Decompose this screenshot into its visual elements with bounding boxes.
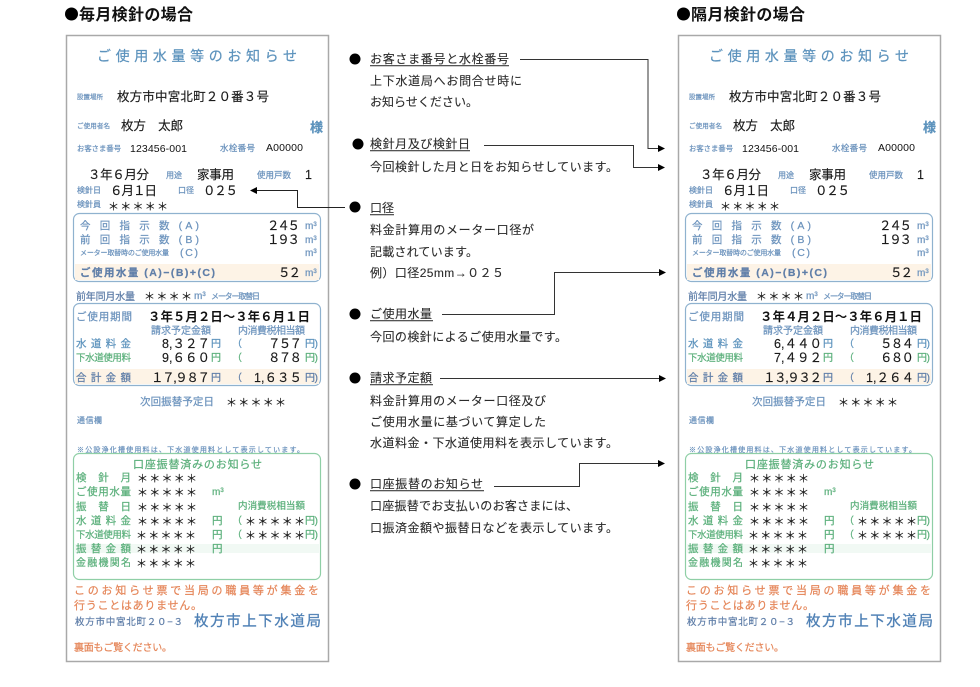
account transfer box: ＊＊＊＊＊ — [748, 544, 808, 556]
meter reading box — [686, 214, 932, 282]
account transfer box: ご使用水量 — [688, 485, 744, 498]
next transfer date: ＊＊＊＊＊ — [226, 397, 286, 409]
account transfer box: ＊＊＊＊＊ — [137, 487, 197, 499]
reading date and meter diameter: ６月１日 — [110, 184, 157, 198]
account transfer box: ＊＊＊＊＊ — [748, 558, 808, 570]
customer and faucet numbers: お客さま番号 — [77, 144, 121, 153]
explanation: planned billing amount: 請求予定額 — [370, 371, 432, 385]
meter reader — [77, 199, 168, 213]
account transfer box — [74, 454, 320, 580]
previous year usage: ＊＊＊＊ — [756, 291, 804, 303]
account transfer box: 水 道 料 金 — [76, 514, 132, 527]
account transfer box: 振 替 金 額 — [688, 542, 744, 555]
meter reading box: m³ — [917, 235, 929, 246]
billing box: 6,４４０ — [774, 337, 822, 351]
reading date and meter diameter: 検針日 — [77, 185, 101, 195]
explanation: water usage: ご使用水量 — [370, 306, 432, 321]
bureau address and name: 枚方市中宮北町２０−３ — [687, 616, 795, 628]
customer and faucet numbers: 123456-001 — [742, 143, 799, 155]
account transfer box: ＊＊＊＊＊ — [136, 544, 196, 556]
billing box: （ — [844, 352, 854, 364]
account transfer box: ＊＊＊＊＊ — [245, 530, 305, 542]
explanation: meter diameter: 口径 — [370, 201, 394, 215]
explanation: account transfer notice — [350, 477, 618, 535]
bureau address and name: 枚方市中宮北町２０−３ — [75, 616, 183, 628]
account transfer box: ＊＊＊＊＊ — [749, 487, 809, 499]
meter reading box: m³ — [917, 248, 929, 259]
account transfer box: ＊＊＊＊＊ — [136, 530, 196, 542]
reading month, use, households: ３年６月分 — [88, 168, 149, 182]
meter reading box: (C) — [792, 247, 810, 259]
meter reading box: 今 回 指 示 数 (A) — [692, 219, 811, 232]
billing box: 円) — [305, 339, 318, 350]
account transfer box: 振 替 日 — [76, 500, 131, 513]
billing box: 円 — [211, 339, 221, 350]
meter reader: 検針員 — [77, 199, 101, 209]
billing box: 合 計 金 額 — [688, 371, 744, 384]
billing box: 円) — [305, 373, 318, 384]
reading month, use, households — [700, 168, 924, 182]
reading date and meter diameter — [689, 184, 850, 198]
meter reading box: ２４５ — [267, 219, 300, 233]
account transfer box — [686, 454, 932, 580]
remarks label: 通信欄 — [689, 415, 714, 425]
explanation: customer and faucet numbers — [350, 52, 522, 109]
arrow: reading month to right card — [484, 146, 665, 171]
reading month, use, households: 使用戸数 — [869, 170, 903, 180]
billing box: 円 — [823, 339, 833, 350]
billing box: ７５７ — [268, 337, 302, 351]
reading date and meter diameter: 検針日 — [689, 185, 713, 195]
warning notice: このお知らせ票で当局の職員等が集金を — [74, 583, 319, 597]
explanation: planned billing amount: 水道料金・下水道使用料を表示しています。 — [370, 435, 618, 450]
billing box: 請求予定金額 — [151, 324, 211, 337]
next transfer date: 次回振替予定日 — [752, 395, 826, 408]
billing box: 1,６３５ — [254, 371, 302, 385]
account transfer box: 水 道 料 金 — [688, 514, 744, 527]
account transfer box: ＊＊＊＊＊ — [137, 516, 197, 528]
explanation: meter diameter — [350, 201, 534, 280]
reading month, use, households: 用途 — [778, 171, 794, 180]
account transfer box: 検 針 月 — [688, 471, 743, 484]
customer and faucet numbers: 水栓番号 — [220, 143, 255, 153]
billing box: 水 道 料 金 — [688, 337, 744, 350]
explanation: water usage: 今回の検針によるご使用水量です。 — [370, 329, 567, 344]
meter reading box: １９３ — [879, 233, 912, 247]
explanation: meter diameter: 例）口径25mm→０２５ — [370, 266, 504, 280]
meter reading box: 前 回 指 示 数 (B) — [80, 233, 199, 246]
billing box: ３年４月２日～３年６月１日 — [760, 309, 922, 324]
account transfer box: 円 — [824, 515, 834, 527]
previous year usage — [688, 290, 872, 303]
customer name — [689, 118, 936, 135]
previous year usage: 前年同月水量 — [76, 290, 135, 303]
reading month, use, households: 1 — [917, 168, 924, 182]
billing box: 請求予定金額 — [763, 324, 823, 337]
meter reading box: m³ — [917, 221, 929, 232]
arrow: diameter to left card — [250, 187, 345, 208]
installation address: 枚方市中宮北町２０番３号 — [729, 89, 881, 104]
heading: bi-monthly reading: 隔月検針の場合 — [691, 5, 805, 24]
account transfer box: ＊＊＊＊＊ — [749, 473, 809, 485]
reading month, use, households: 使用戸数 — [257, 170, 291, 180]
meter reading box: m³ — [305, 248, 317, 259]
account transfer box: 円 — [212, 543, 222, 555]
meter reading box: m³ — [917, 268, 929, 279]
reading month, use, households — [88, 168, 312, 182]
billing box: 1,２６４ — [866, 371, 914, 385]
explanation: account transfer notice: 口座振替のお知らせ — [370, 477, 483, 491]
installation address: 枚方市中宮北町２０番３号 — [117, 89, 269, 104]
explanation: customer and faucet numbers: お知らせください。 — [370, 95, 478, 109]
billing box — [686, 304, 932, 386]
explanation: planned billing amount: ご使用水量に基づいて算定した — [370, 414, 546, 429]
previous year usage: メーター取替日 — [211, 291, 260, 301]
reading month, use, households: 家事用 — [197, 168, 234, 182]
previous year usage: m³ — [806, 291, 818, 302]
account transfer box: 振 替 日 — [688, 500, 743, 513]
explanation: meter diameter: 記載されています。 — [370, 245, 478, 259]
account transfer box: （ — [844, 529, 854, 541]
account transfer box: ＊＊＊＊＊ — [857, 516, 917, 528]
septic note: ※公設浄化槽使用料は、下水道使用料として表示しています。 — [77, 445, 304, 454]
arrow: billing amount to right card — [440, 375, 666, 382]
account transfer box: ＊＊＊＊＊ — [749, 516, 809, 528]
billing box: １３,９３２ — [763, 371, 822, 385]
warning notice — [686, 583, 931, 612]
arrow: account transfer to right card — [494, 460, 665, 486]
card title: ご使用水量等のお知らせ — [709, 48, 909, 64]
reading month, use, households: 用途 — [166, 171, 182, 180]
explanation: reading month and date: 検針月及び検針日 — [370, 136, 470, 151]
account transfer box: 円) — [917, 516, 930, 527]
account transfer box: 円) — [917, 530, 930, 541]
account transfer box: 円) — [305, 516, 318, 527]
account transfer box: 円) — [305, 530, 318, 541]
warning notice — [74, 583, 319, 612]
meter reading box: (C) — [180, 247, 198, 259]
account transfer box: 円 — [212, 515, 222, 527]
customer and faucet numbers: A00000 — [266, 142, 303, 154]
billing box: 下水道使用料 — [76, 352, 131, 364]
billing box: 8,３２７ — [162, 337, 210, 351]
account transfer box: ＊＊＊＊＊ — [245, 516, 305, 528]
previous year usage: ＊＊＊＊ — [144, 291, 192, 303]
bureau address and name: 枚方市上下水道局 — [194, 613, 321, 630]
billing box: （ — [232, 338, 242, 350]
next transfer date: 次回振替予定日 — [140, 395, 214, 408]
meter reading box: ５２ — [278, 266, 301, 280]
account transfer box: 金融機関名 — [76, 556, 131, 569]
billing box: （ — [232, 352, 242, 364]
account transfer box: ご使用水量 — [76, 485, 132, 498]
meter reading box: 前 回 指 示 数 (B) — [692, 233, 811, 246]
customer name: ご使用者名 — [77, 121, 110, 130]
billing box: 円) — [917, 339, 930, 350]
septic note: ※公設浄化槽使用料は、下水道使用料として表示しています。 — [689, 445, 916, 454]
meter reader: 検針員 — [689, 199, 713, 209]
explanation: account transfer notice: 口振済金額や振替日などを表示しています。 — [370, 521, 618, 535]
explanation: planned billing amount — [350, 371, 618, 450]
panel: monthly reading notice card — [66, 36, 328, 662]
see reverse note: 裏面もご覧ください。 — [74, 641, 172, 654]
billing box: ８７８ — [268, 351, 302, 365]
billing box: ６８０ — [880, 351, 914, 365]
meter reading box: ご使用水量 (A)−(B)+(C) — [692, 266, 827, 279]
see reverse note: 裏面もご覧ください。 — [686, 641, 784, 654]
explanation: customer and faucet numbers: お客さま番号と水栓番号 — [370, 52, 509, 66]
billing box: 内消費税相当額 — [850, 324, 917, 337]
warning notice: このお知らせ票で当局の職員等が集金を — [686, 583, 931, 597]
account transfer box: 円 — [212, 529, 222, 541]
meter reader: ＊＊＊＊＊ — [108, 201, 168, 213]
previous year usage: 前年同月水量 — [688, 290, 747, 303]
account transfer box: 口座振替済みのお知らせ — [745, 457, 874, 471]
bureau address and name — [687, 613, 933, 630]
installation address: 設置場所 — [689, 92, 716, 101]
explanation: reading month and date: 今回検針した月と日をお知らせしています。 — [370, 159, 618, 174]
customer name — [77, 118, 323, 135]
account transfer box: ＊＊＊＊＊ — [136, 558, 196, 570]
customer name: 枚方 太郎 — [733, 118, 795, 133]
reading date and meter diameter: ６月１日 — [722, 184, 769, 198]
account transfer box: 下水道使用料 — [76, 529, 131, 541]
customer name: 様 — [310, 120, 323, 135]
arrow: water usage to right card — [442, 269, 666, 314]
meter reading box: m³ — [305, 235, 317, 246]
reading date and meter diameter: 口径 — [790, 185, 806, 195]
reading month, use, households: ３年６月分 — [700, 168, 761, 182]
billing box: ３年５月２日～３年６月１日 — [148, 309, 310, 324]
billing box: 円) — [917, 373, 930, 384]
meter reading box: ５２ — [890, 266, 913, 280]
account transfer box: 内消費税相当額 — [238, 500, 305, 512]
customer name: 枚方 太郎 — [121, 118, 183, 133]
meter reading box: m³ — [305, 221, 317, 232]
arrow: customer numbers to right card — [520, 60, 665, 152]
bureau address and name — [75, 613, 321, 630]
account transfer box: （ — [232, 515, 242, 527]
billing box: 合 計 金 額 — [76, 371, 132, 384]
previous year usage — [76, 290, 260, 303]
account transfer box: 下水道使用料 — [688, 529, 743, 541]
reading date and meter diameter — [77, 184, 238, 198]
account transfer box: ＊＊＊＊＊ — [137, 502, 197, 514]
meter reading box: m³ — [305, 268, 317, 279]
billing box: 内消費税相当額 — [238, 324, 305, 337]
meter reading box: メーター取替時のご使用水量 — [80, 248, 169, 257]
billing box: （ — [844, 338, 854, 350]
customer and faucet numbers — [77, 142, 303, 155]
account transfer box: 円 — [824, 529, 834, 541]
explanation: reading month and date — [352, 136, 618, 174]
billing box: １７,９８７ — [151, 371, 210, 385]
next transfer date — [140, 395, 286, 409]
reading date and meter diameter: ０２５ — [815, 184, 850, 198]
warning notice: 行うことはありません。 — [686, 599, 814, 612]
meter reading box: １９３ — [267, 233, 300, 247]
meter reader: ＊＊＊＊＊ — [720, 201, 780, 213]
explanation: meter diameter: 料金計算用のメーター口径が — [370, 222, 534, 237]
account transfer box: 検 針 月 — [76, 471, 131, 484]
previous year usage: m³ — [194, 291, 206, 302]
next transfer date — [752, 395, 898, 409]
next transfer date: ＊＊＊＊＊ — [838, 397, 898, 409]
explanation: planned billing amount: 料金計算用のメーター口径及び — [370, 393, 546, 408]
meter reading box: ご使用水量 (A)−(B)+(C) — [80, 266, 215, 279]
reading date and meter diameter: ０２５ — [203, 184, 238, 198]
explanation: account transfer notice: 口座振替でお支払いのお客さまには、 — [370, 499, 578, 513]
remarks label: 通信欄 — [77, 415, 102, 425]
billing box: （ — [232, 372, 242, 384]
account transfer box: m³ — [824, 487, 836, 498]
billing box: ご使用期間 — [76, 310, 132, 323]
previous year usage: メーター取替日 — [823, 291, 872, 301]
customer and faucet numbers: お客さま番号 — [689, 144, 733, 153]
account transfer box: ＊＊＊＊＊ — [748, 530, 808, 542]
billing box: 9,６６０ — [162, 351, 210, 365]
explanation: water usage — [350, 306, 567, 344]
account transfer box: m³ — [212, 487, 224, 498]
reading month, use, households: 1 — [305, 168, 312, 182]
meter reading box: メーター取替時のご使用水量 — [692, 248, 781, 257]
card title: ご使用水量等のお知らせ — [97, 48, 297, 64]
account transfer box: ＊＊＊＊＊ — [749, 502, 809, 514]
billing box: 水 道 料 金 — [76, 337, 132, 350]
customer and faucet numbers: A00000 — [878, 142, 915, 154]
account transfer box: 内消費税相当額 — [850, 500, 917, 512]
account transfer box: 振 替 金 額 — [76, 542, 132, 555]
billing box — [74, 304, 320, 386]
heading: monthly reading: 毎月検針の場合 — [79, 5, 193, 24]
billing box: 下水道使用料 — [688, 352, 743, 364]
account transfer box: 金融機関名 — [688, 556, 743, 569]
explanation: customer and faucet numbers: 上下水道局へお問合せ時に — [370, 74, 522, 88]
billing box: 円 — [823, 373, 833, 384]
billing box: 円 — [211, 373, 221, 384]
customer name: ご使用者名 — [689, 121, 722, 130]
installation address: 設置場所 — [77, 92, 104, 101]
billing box: ご使用期間 — [688, 310, 744, 323]
panel: bi-monthly reading notice card — [678, 36, 940, 662]
billing box: 7,４９２ — [774, 351, 822, 365]
meter reading box — [74, 214, 320, 282]
warning notice: 行うことはありません。 — [74, 599, 202, 612]
customer and faucet numbers — [689, 142, 915, 155]
account transfer box: ＊＊＊＊＊ — [857, 530, 917, 542]
billing box: 円) — [917, 353, 930, 364]
billing box: 円 — [211, 353, 221, 364]
billing box: 円) — [305, 353, 318, 364]
meter reader — [689, 199, 780, 213]
account transfer box: （ — [232, 529, 242, 541]
meter reading box: ２４５ — [879, 219, 912, 233]
billing box: 円 — [823, 353, 833, 364]
reading date and meter diameter: 口径 — [178, 185, 194, 195]
account transfer box: 円 — [824, 543, 834, 555]
bureau address and name: 枚方市上下水道局 — [806, 613, 933, 630]
meter reading box: 今 回 指 示 数 (A) — [80, 219, 199, 232]
reading month, use, households: 家事用 — [809, 168, 846, 182]
account transfer box: 口座振替済みのお知らせ — [133, 457, 262, 471]
billing box: （ — [844, 372, 854, 384]
account transfer box: ＊＊＊＊＊ — [137, 473, 197, 485]
billing box: ５８４ — [880, 337, 914, 351]
account transfer box: （ — [844, 515, 854, 527]
customer and faucet numbers: 水栓番号 — [832, 143, 867, 153]
customer and faucet numbers: 123456-001 — [130, 143, 187, 155]
customer name: 様 — [923, 120, 936, 135]
